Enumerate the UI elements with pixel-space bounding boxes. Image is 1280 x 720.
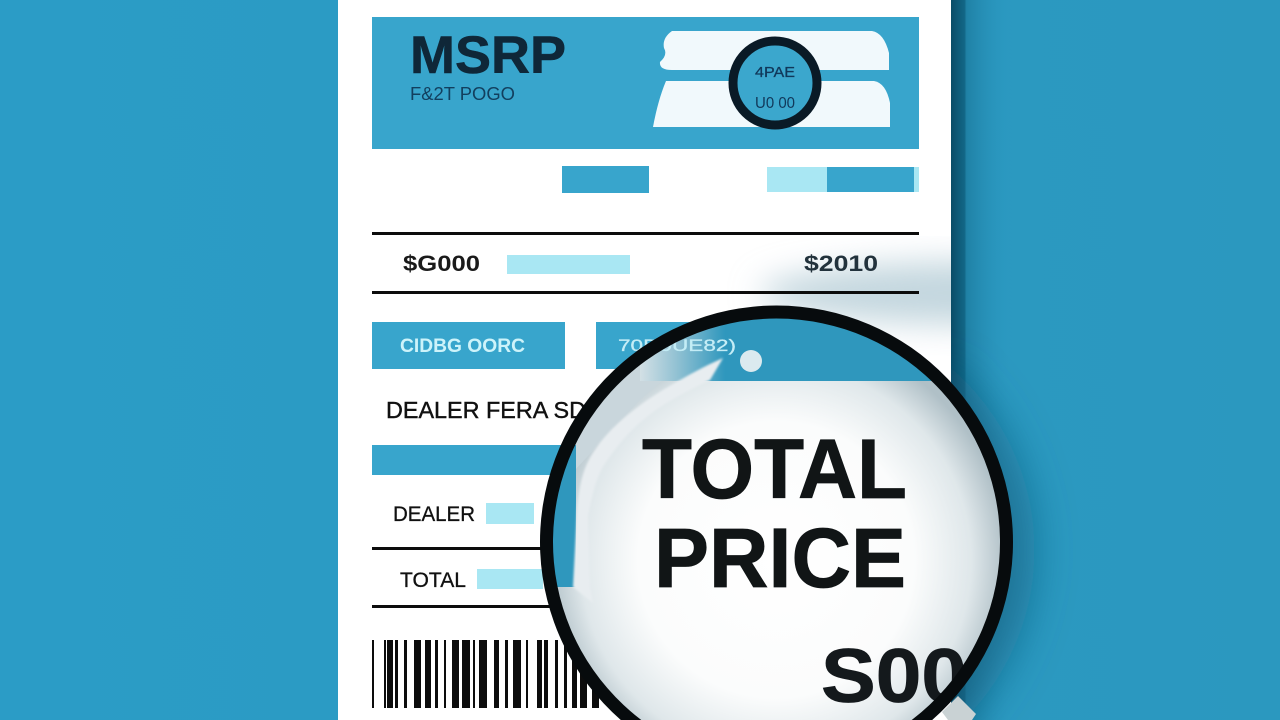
- icon: seal: U0 00: [755, 95, 795, 112]
- total row: TOTAL: [400, 569, 466, 592]
- price right: $2010: [804, 251, 878, 276]
- total row: [372, 569, 572, 608]
- upper left lens haze: [576, 365, 652, 468]
- icon: seal: [733, 41, 817, 125]
- price row: [372, 232, 951, 341]
- panel: MSRP header: [372, 17, 919, 149]
- heading: price: PRICE: [654, 511, 906, 605]
- magnified teal band: [640, 318, 951, 381]
- icon: seal: 4PAE: [755, 64, 795, 81]
- dealer row: DEALER: [393, 503, 475, 526]
- barcode: [372, 640, 599, 708]
- lens dot: [740, 350, 762, 372]
- sticker paper: [338, 0, 951, 720]
- header background: [372, 17, 919, 149]
- lens glass: [558, 381, 1000, 720]
- handle: [942, 696, 976, 720]
- panel: lens: [540, 306, 1013, 720]
- lens reflection: [573, 358, 723, 603]
- heading: MSRP: MSRP: [410, 26, 566, 85]
- label box right: [596, 322, 756, 369]
- infographic scene: [338, 0, 1052, 720]
- magnified teal strip: [553, 445, 576, 587]
- paper drop shadow: [951, 0, 1013, 720]
- dealer fee label: DEALER FERA SD: [386, 397, 586, 423]
- teal bar: [372, 445, 577, 475]
- heading: total: TOTAL: [642, 422, 907, 516]
- band label: 70D0UE82): [618, 336, 736, 355]
- lens ring: [540, 305, 1013, 720]
- label box right: 70D0UE82): [618, 336, 736, 355]
- icon: lower white shape: [653, 81, 890, 127]
- teal tag: [562, 166, 649, 193]
- label box left: [372, 322, 565, 369]
- label box left: CIDBG OORC: [400, 336, 525, 357]
- panel: price sticker: [338, 0, 951, 720]
- magnifier cast shadow on background: [900, 368, 1035, 720]
- light and teal tag: [767, 167, 919, 192]
- dealer row: [372, 503, 562, 550]
- price left: $G000: [403, 251, 480, 276]
- icon: magnifying glass: [540, 305, 1013, 720]
- light bar: [507, 255, 630, 274]
- header subtext: F&2T POGO: [410, 84, 515, 104]
- icon: upper white shape: [660, 31, 889, 70]
- price value: S00: [821, 634, 967, 719]
- fog behind lens: [754, 245, 951, 341]
